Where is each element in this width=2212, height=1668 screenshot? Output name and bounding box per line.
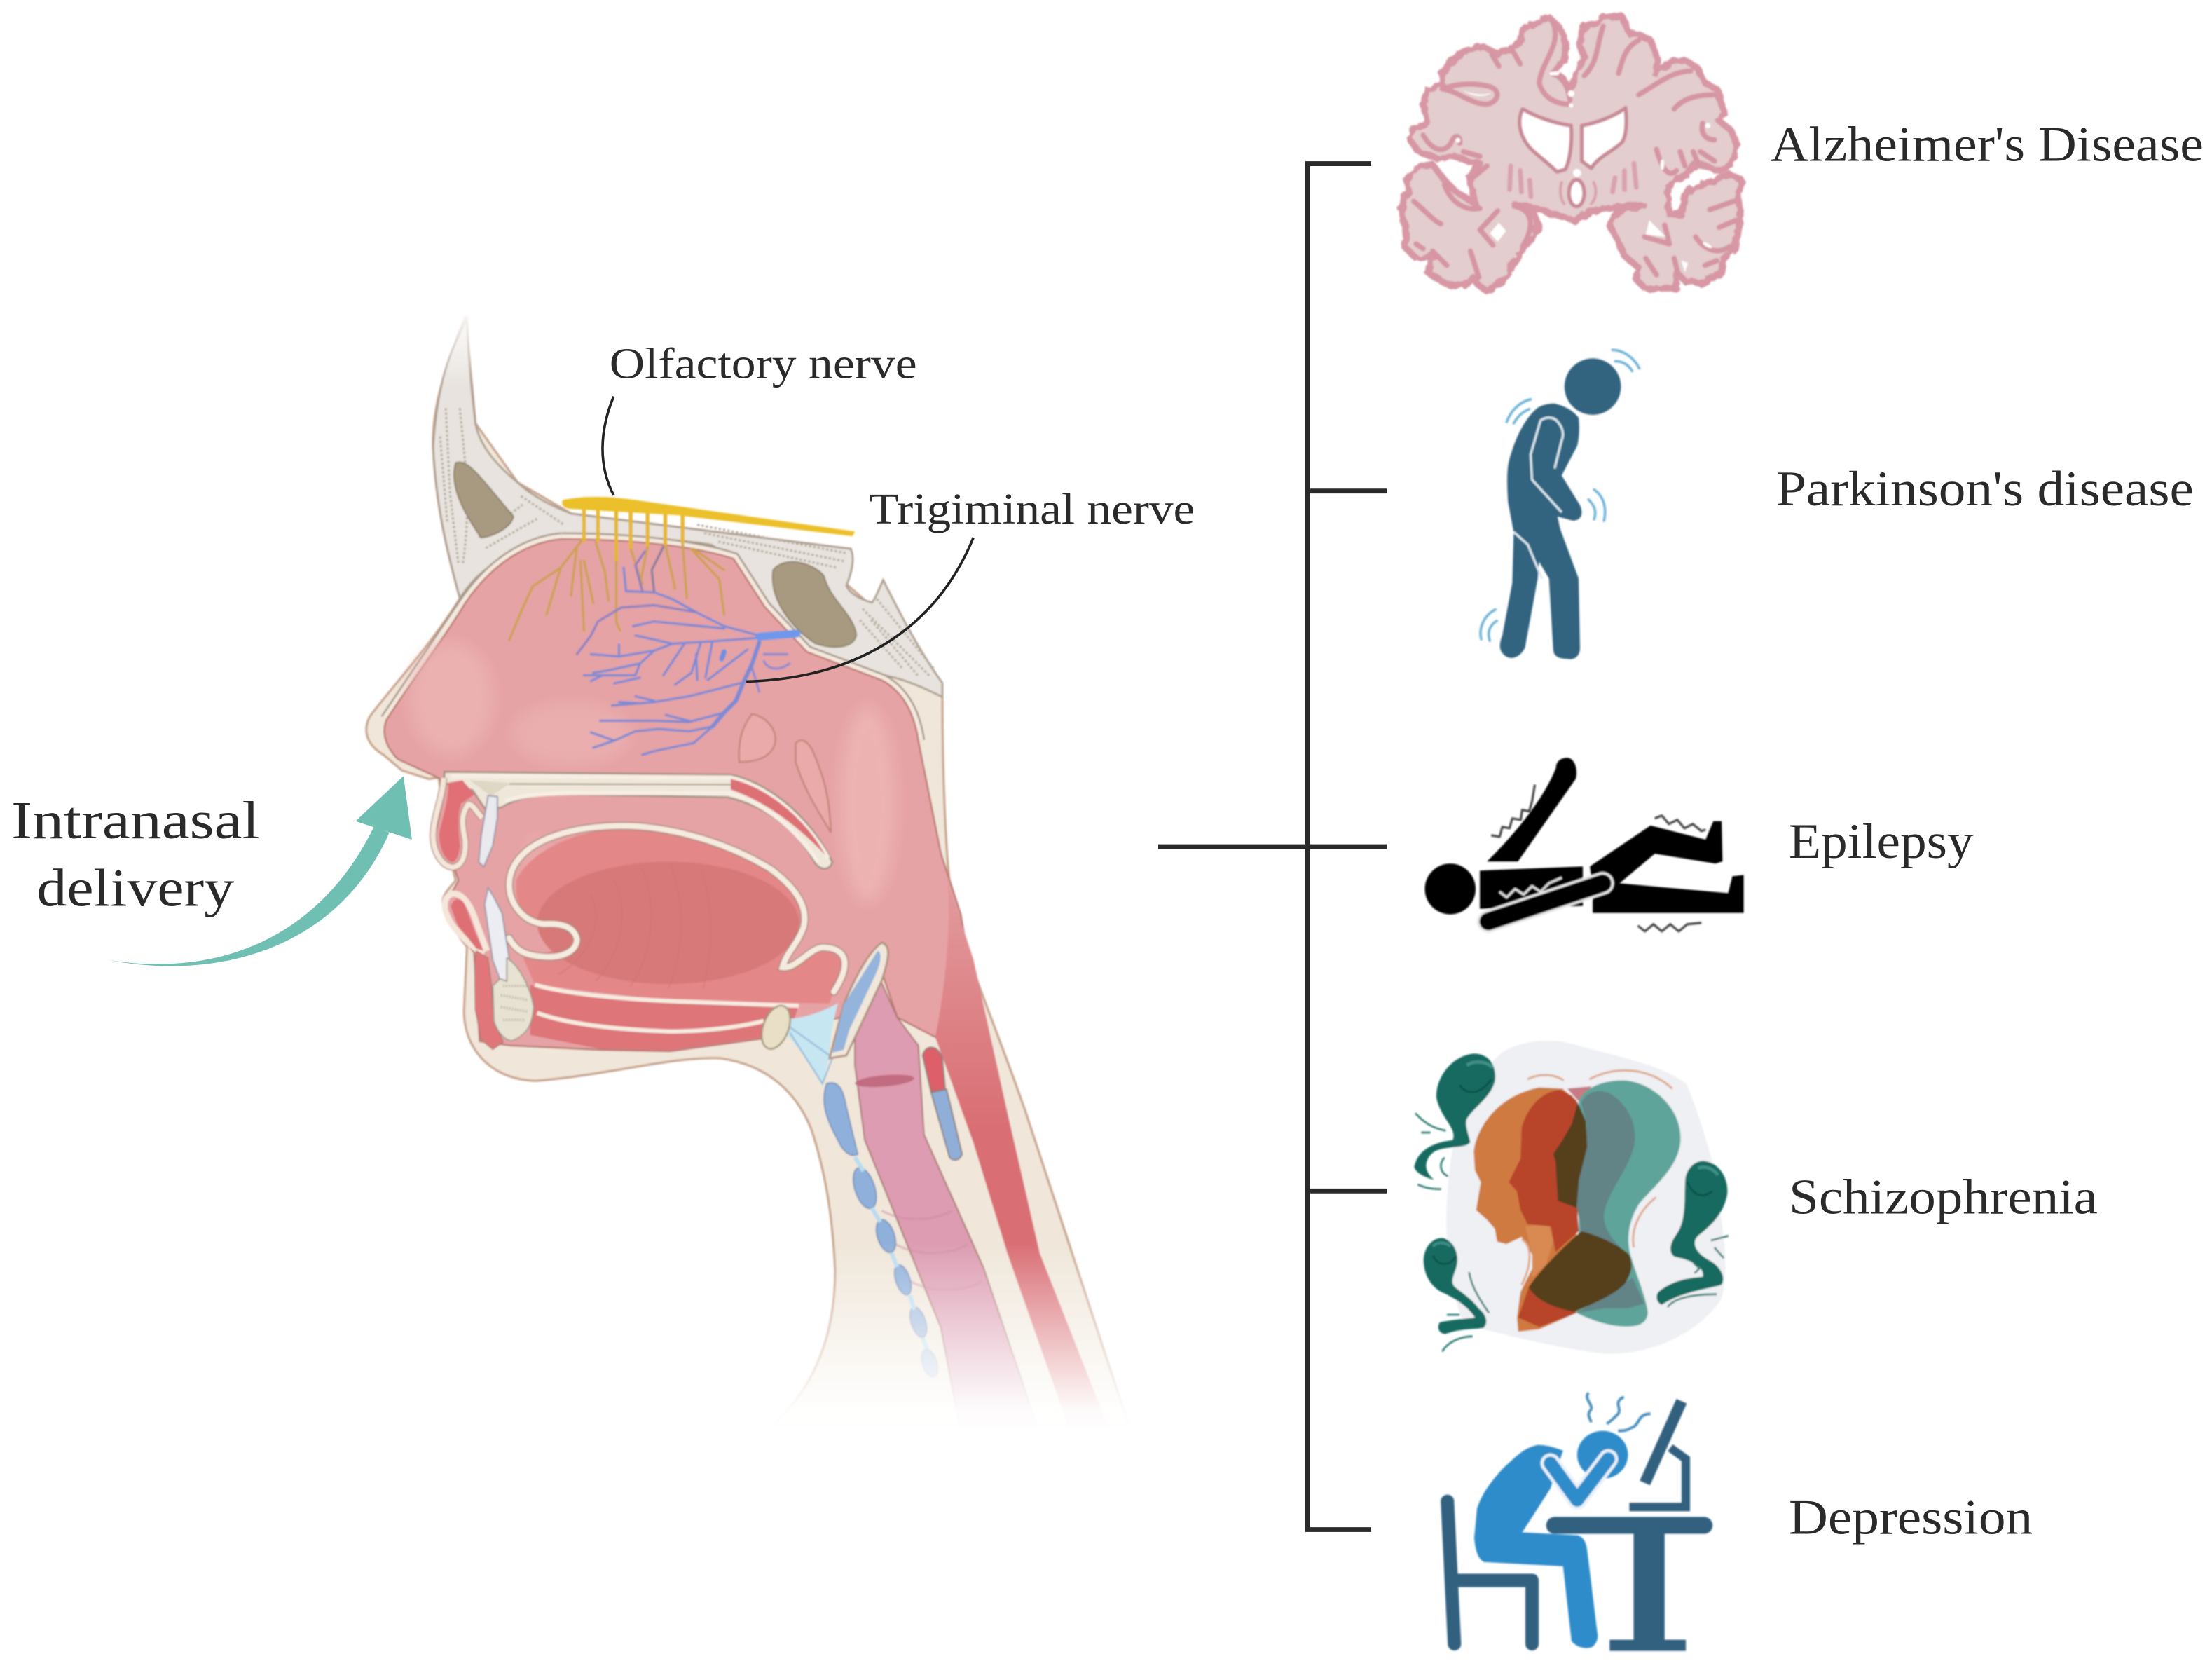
palate [444,772,832,868]
desk [1555,1521,1704,1529]
neck highlight [1525,1224,1553,1278]
laryngeal cartilages [824,1083,941,1379]
nasal cavity shading [409,642,896,917]
icon: seizure figure [1425,758,1744,931]
orange head [1473,1088,1576,1332]
person head [1577,1431,1628,1479]
panel: head anatomy cross-section [366,299,1171,1440]
callout: trigeminal nerve [746,485,1195,681]
lower lip [451,899,483,951]
label: Schizophrenia: Schizophrenia [1789,1170,2098,1224]
label: Epilepsy: Epilepsy [1789,814,1974,869]
cavity lining [387,539,919,741]
ghost: top left [1414,1053,1495,1189]
body [1500,404,1581,659]
raised arm [1487,758,1576,861]
trigeminal branches [577,547,797,755]
head [1565,358,1621,415]
person body [1474,1445,1598,1648]
stress squiggles [1587,1393,1651,1431]
ghost: right [1656,1161,1729,1307]
background blob [1446,1041,1725,1354]
skin silhouette [366,316,1129,1425]
arm and leg outlines [1513,418,1563,578]
dark inner head [1553,1102,1587,1208]
jaw bone [493,958,534,1041]
icon: Parkinson's stooped figure [1481,350,1640,659]
label: Parkinson's disease: Parkinson's disease [1776,462,2194,517]
brain tissue [1402,17,1742,292]
brain striatum [1509,163,1636,204]
arrow: intranasal delivery [106,776,412,966]
hyoid bone [756,1002,795,1053]
lower tooth [485,888,509,981]
callout: trigeminal nerve: Trigiminal nerve [869,485,1195,533]
brain white spaces [1455,71,1712,273]
pink sliver [1567,1086,1592,1102]
grey-teal shoulder [1576,1278,1644,1313]
chair [1448,1501,1532,1644]
grey-teal inner head [1575,1091,1635,1251]
tremor arcs [1481,350,1640,641]
floor of mouth muscle [530,985,799,1050]
folded arms [1551,1459,1608,1500]
orange arcs [1522,1070,1672,1285]
back-of-neck muscle band [935,882,1108,1425]
vocal cords [855,1073,914,1089]
frontal sinus [454,463,514,538]
trachea [855,973,1037,1425]
lower lip ring [445,894,487,955]
icon: brain section [1402,17,1742,292]
callout: olfactory nerve [603,340,917,495]
dark shoulders [1529,1231,1631,1312]
tongue contour [509,826,845,992]
label: Depression: Depression [1789,1491,2033,1545]
turbinate and tube outlines [739,714,831,833]
sphenoid sinus [773,562,856,647]
neck fade-out [734,1242,1171,1440]
forehead fade-out [416,299,494,387]
icon: depressed person at desk [1448,1393,1704,1651]
brain ventricles [1520,108,1626,206]
monitor [1629,1448,1686,1507]
upper lip ring [433,778,482,867]
olfactory bulb [562,497,855,536]
label: Alzheimer's Disease: Alzheimer's Disease [1771,118,2204,172]
icon: schizophrenia heads and ghosts [1414,1041,1729,1354]
lower arm [1488,883,1602,922]
ghost: bottom left [1424,1238,1489,1351]
teal head [1576,1081,1681,1327]
shake marks [1491,784,1705,931]
bracket connector [1158,164,1387,1529]
callout: olfactory nerve: Olfactory nerve [610,340,917,388]
nasal cavity and pharynx [385,539,973,1051]
tongue muscle [516,828,845,1004]
upper lip [439,780,474,862]
hyoid membrane [784,1004,838,1086]
nerves [509,497,855,755]
head [1425,863,1476,915]
brain sulci [1414,24,1736,278]
red and blue cartilage column [923,1047,962,1160]
chin muscle [474,951,503,1049]
legs [1590,821,1744,913]
torso [1480,866,1583,909]
tongue and oral structures [433,778,845,1050]
skull bone [433,319,942,697]
red shoulder [1518,1287,1576,1327]
label: Intranasal delivery: delivery [36,859,234,918]
red head [1509,1090,1579,1252]
upper tooth [479,795,497,867]
label: Intranasal delivery [11,791,259,918]
epiglottis [830,943,888,1058]
olfactory nerve fibres [509,538,724,640]
olfactory rootlets [584,507,682,561]
label: Intranasal delivery: Intranasal [11,791,259,850]
tongue core [537,861,799,984]
